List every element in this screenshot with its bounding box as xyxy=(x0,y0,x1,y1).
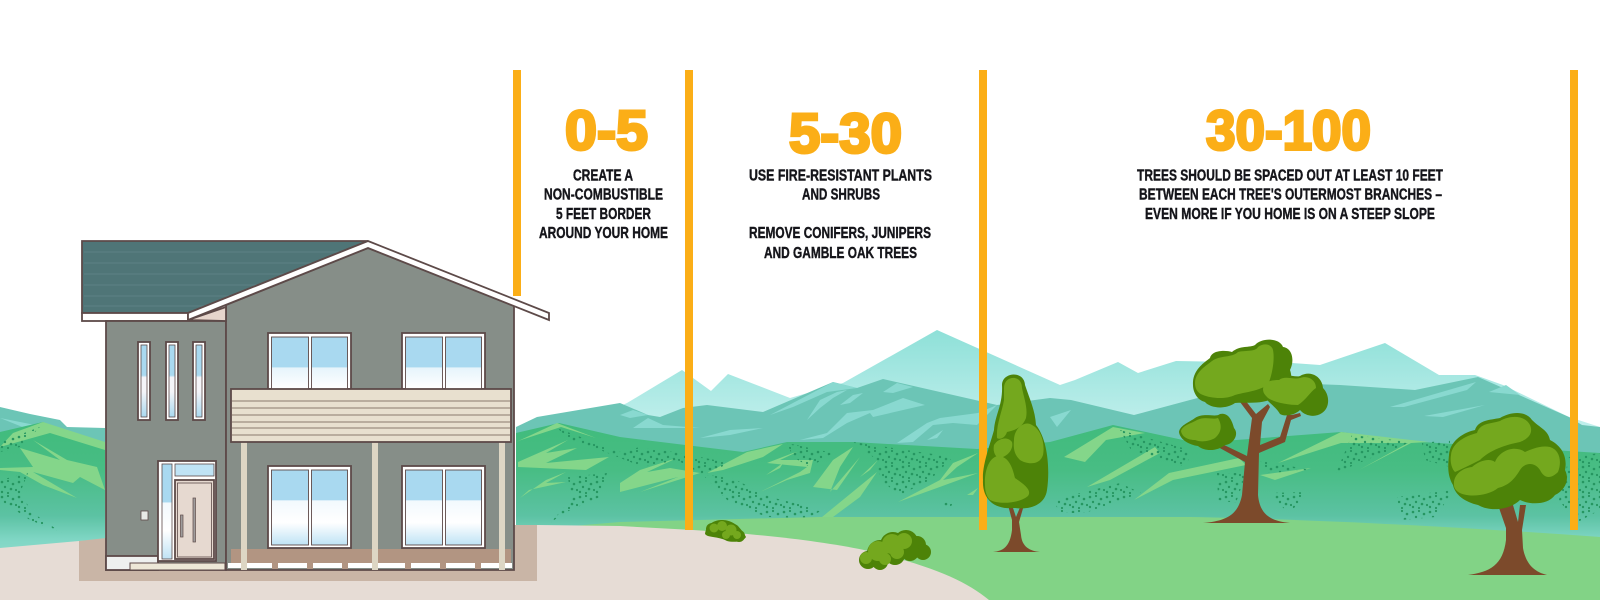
text block: zone 0-5 advice xyxy=(539,168,668,242)
lower left window xyxy=(268,466,351,548)
round tree xyxy=(1448,413,1567,575)
door xyxy=(175,480,214,559)
text block: zone 5-30 advice xyxy=(749,168,932,262)
text block: zone 30-100 advice: BETWEEN EACH TREE'S OUTERMOST BRANCHES – xyxy=(1139,187,1442,204)
shrub light xyxy=(710,521,741,539)
door handles xyxy=(180,498,196,542)
foliage light xyxy=(1451,417,1560,495)
gable trim xyxy=(188,241,549,320)
grass xyxy=(560,517,1600,600)
main roof xyxy=(82,241,368,313)
back mountains xyxy=(600,330,1600,450)
house foundation xyxy=(79,525,537,581)
zone divider bars xyxy=(513,70,1578,530)
trunk and branches xyxy=(1203,400,1301,523)
foliage light xyxy=(985,378,1044,503)
tree speckles on hills xyxy=(0,427,1600,533)
spreading tree xyxy=(1179,340,1328,523)
large shrub xyxy=(859,530,931,570)
middle mountains xyxy=(0,377,1600,480)
foliage light xyxy=(1181,344,1316,441)
heading: 30-100: 30-100 xyxy=(1206,98,1371,162)
text block: zone 30-100 advice xyxy=(1137,168,1443,223)
foliage shadow xyxy=(1448,413,1567,509)
foliage shadow xyxy=(1179,340,1328,450)
upper left window xyxy=(268,333,351,389)
roof shingle lines xyxy=(84,252,340,306)
heading: 0-5: 0-5 xyxy=(565,98,648,162)
text block: zone 5-30 advice: REMOVE CONIFERS, JUNIPERS xyxy=(749,225,931,242)
shrub shadow xyxy=(859,530,931,570)
house xyxy=(82,241,549,570)
entry step xyxy=(130,563,225,570)
text block: zone 5-30 advice: USE FIRE-RESISTANT PLANTS xyxy=(749,168,932,184)
text block: zone 0-5 advice: 5 FEET BORDER xyxy=(556,206,651,223)
entry frame xyxy=(158,461,216,561)
top light xyxy=(175,464,214,476)
shrub light xyxy=(860,533,912,565)
upper right window xyxy=(402,333,485,389)
shrub shadow xyxy=(705,520,746,542)
balcony xyxy=(231,389,511,442)
green hills xyxy=(0,422,1600,560)
trunk xyxy=(993,505,1040,552)
panel: 5-30 feet xyxy=(749,102,932,262)
trunk xyxy=(1468,505,1547,575)
left wall xyxy=(106,321,226,570)
landscape background xyxy=(0,330,1600,600)
deck feet xyxy=(272,563,481,569)
roof fascia xyxy=(82,313,188,321)
text block: zone 0-5 advice: AROUND YOUR HOME xyxy=(539,225,668,242)
lower white strip xyxy=(228,563,512,568)
intercom xyxy=(141,511,148,520)
text block: zone 0-5 advice: CREATE A xyxy=(573,168,633,184)
main wall xyxy=(226,248,514,570)
small shrub xyxy=(705,520,746,542)
base white strip xyxy=(106,556,158,570)
panel: 0-5 feet xyxy=(539,98,668,242)
deck xyxy=(231,549,511,563)
heading: 5-30: 5-30 xyxy=(789,102,902,164)
text block: zone 30-100 advice: TREES SHOULD BE SPACED OUT AT LEAST 10 FEET xyxy=(1137,168,1443,184)
cypress tree xyxy=(983,374,1048,552)
text block: zone 30-100 advice: EVEN MORE IF YOU HOME IS ON A STEEP SLOPE xyxy=(1145,206,1435,223)
beige ground xyxy=(0,525,989,600)
text block: zone 5-30 advice: AND GAMBLE OAK TREES xyxy=(764,245,917,262)
lower right window xyxy=(402,466,485,548)
balcony posts xyxy=(241,442,505,570)
slit windows xyxy=(138,342,205,420)
foliage shadow xyxy=(983,374,1048,508)
text block: zone 0-5 advice: NON-COMBUSTIBLE xyxy=(544,187,663,204)
side light xyxy=(162,464,172,559)
mountain highlights xyxy=(0,382,1520,443)
panel: 30-100 feet xyxy=(1137,98,1443,223)
soffit xyxy=(188,307,226,321)
hill highlights xyxy=(0,422,1429,517)
text block: zone 5-30 advice: AND SHRUBS xyxy=(802,187,880,204)
